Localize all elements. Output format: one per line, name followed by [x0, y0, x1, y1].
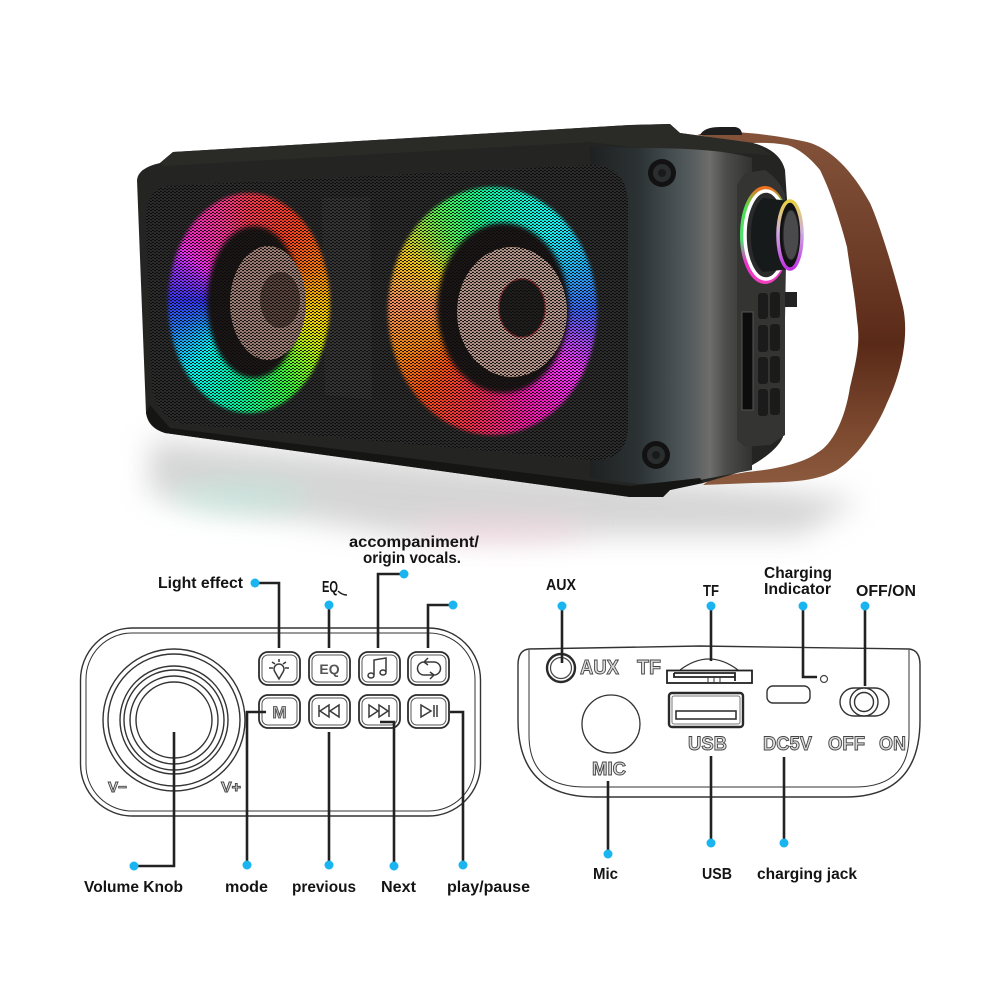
label: TF	[703, 583, 719, 661]
LED collar	[742, 188, 788, 282]
USB mark: USB	[688, 734, 727, 755]
label: OFF/ON	[856, 583, 916, 686]
label: previous: previous	[292, 879, 356, 896]
grille lights and drivers	[140, 160, 635, 465]
button: play/pause	[408, 695, 449, 728]
TF slot	[667, 659, 752, 683]
volume knob	[751, 198, 802, 272]
label: light effect	[158, 575, 279, 648]
label: Mic	[593, 781, 618, 883]
label: accompaniment: origin vocals.	[363, 550, 461, 567]
floor shadow	[150, 440, 860, 542]
label: charging jack: charging jack	[757, 866, 857, 883]
label: mode	[225, 712, 268, 896]
label: TF: TF	[703, 583, 719, 600]
AUX mark: AUX	[580, 657, 620, 679]
label: USB	[702, 756, 732, 883]
label: AUX: AUX	[546, 577, 577, 594]
bottom lip	[146, 405, 703, 497]
product photo: party speaker	[137, 124, 905, 542]
right driver cone	[437, 223, 569, 393]
panel outline	[518, 646, 920, 797]
label: EQ	[322, 579, 347, 648]
label: charging indicator	[764, 565, 832, 677]
label: volume knob	[84, 732, 183, 896]
USB port	[669, 693, 743, 727]
button: EQ	[309, 652, 350, 685]
DC5V mark: DC5V	[763, 734, 812, 755]
charging LED	[820, 676, 828, 682]
button: vocals	[359, 652, 400, 685]
control plate	[737, 170, 785, 447]
side buttons	[758, 292, 780, 416]
label: volume knob: Volume Knob	[84, 879, 183, 896]
grille base	[146, 165, 628, 460]
label: next	[380, 722, 416, 896]
label: charging indicator: Indicator	[764, 581, 831, 598]
button: M	[259, 695, 300, 728]
microphone opening	[582, 695, 640, 753]
micro USB port	[767, 686, 810, 703]
MIC mark: MIC	[592, 759, 626, 779]
left LED ring	[164, 189, 334, 417]
V+ mark: V+	[221, 779, 241, 796]
ON mark: ON	[879, 734, 906, 755]
left driver cone	[207, 226, 306, 378]
label: mode: mode	[225, 879, 268, 896]
TF mark: TF	[637, 657, 661, 679]
label: charging indicator: Charging	[764, 565, 832, 582]
mid baffle detail	[322, 197, 372, 400]
strap rivet	[700, 127, 742, 135]
button: next	[359, 695, 400, 728]
volume knob drawing	[103, 649, 245, 791]
label: USB: USB	[702, 866, 732, 883]
power switch	[840, 688, 889, 716]
label: play/pause: play/pause	[447, 879, 530, 896]
label: charging jack	[757, 757, 857, 883]
screw bottom	[642, 441, 670, 469]
label: accompaniment: accompaniment/	[349, 534, 480, 551]
button: EQ: EQ	[319, 661, 340, 677]
AUX jack	[547, 654, 575, 682]
panel: top control panel diagram	[80, 534, 530, 896]
V- mark: V−	[108, 779, 127, 796]
display slot	[742, 312, 753, 410]
panel: rear ports diagram	[518, 565, 920, 883]
right LED ring	[384, 183, 601, 439]
label: next: Next	[381, 879, 416, 896]
top band	[160, 124, 772, 166]
label: play/pause	[447, 712, 530, 896]
OFF mark: OFF	[828, 734, 865, 755]
label: EQ: EQ	[322, 579, 338, 596]
label: OFF/ON: OFF/ON	[856, 583, 916, 600]
label: loop	[428, 600, 458, 648]
metal mesh	[140, 160, 635, 465]
tab	[785, 292, 797, 307]
screw top	[648, 159, 676, 187]
label: previous	[292, 732, 356, 896]
button: light effect	[259, 652, 300, 685]
label: Mic: Mic	[593, 866, 618, 883]
button: loop	[408, 652, 449, 685]
label: AUX	[546, 577, 577, 663]
button: previous	[309, 695, 350, 728]
label: light effect: Light effect	[158, 575, 243, 592]
rounded side casing	[590, 146, 752, 484]
panel outline	[80, 628, 480, 816]
button: M: M	[272, 703, 287, 722]
carrying strap	[697, 132, 905, 485]
label: accompaniment	[349, 534, 480, 648]
speaker body	[137, 124, 787, 497]
